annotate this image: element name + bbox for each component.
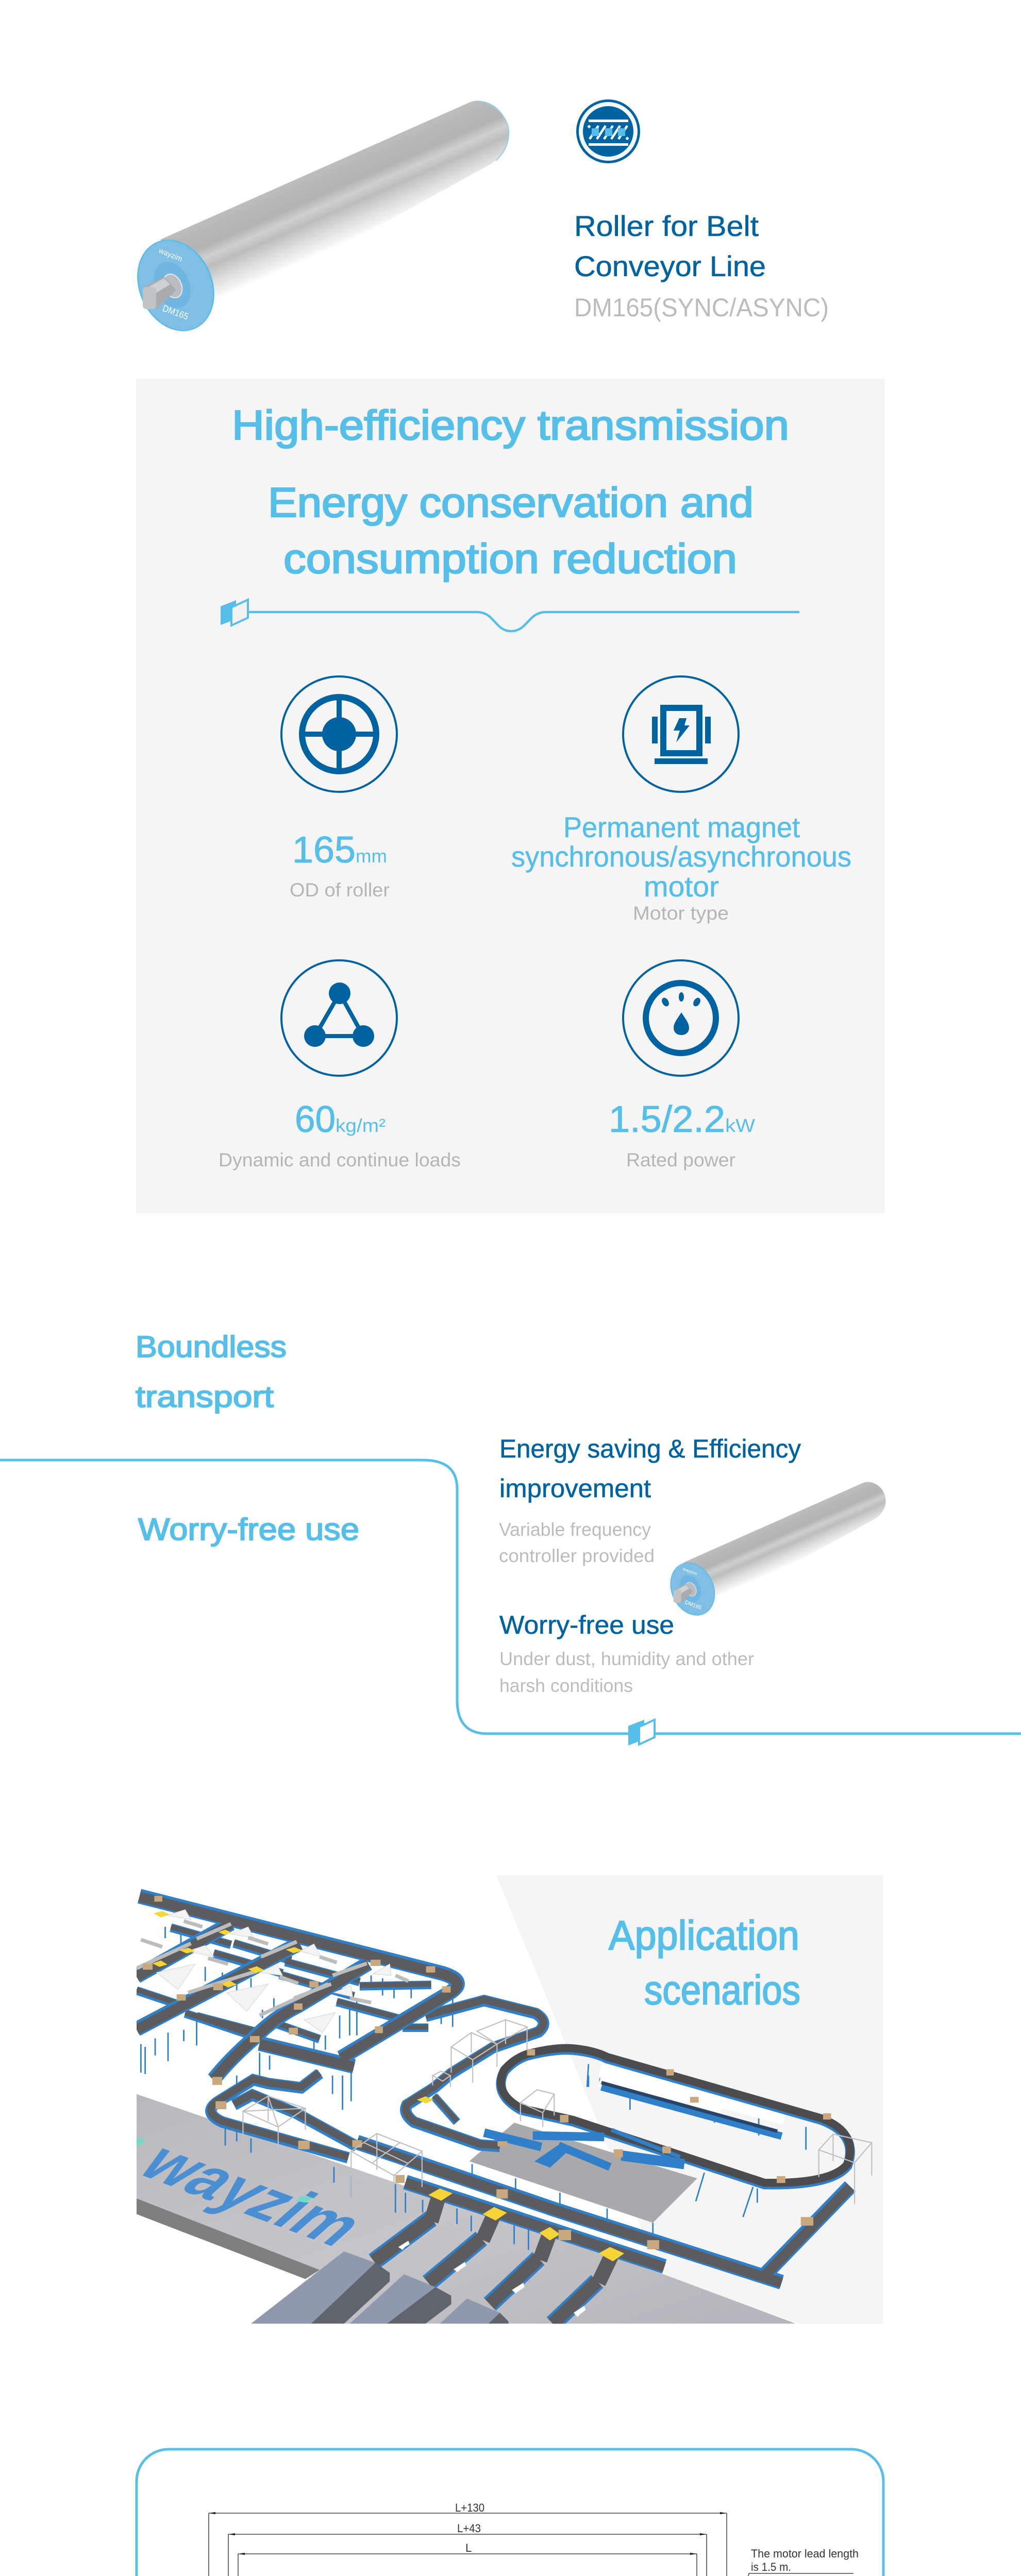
conveyor line scene [123,1896,872,2324]
floor arrows [398,2241,585,2317]
spec: loads [219,1099,461,1171]
spec: motor type: synchronous/asynchronous [511,840,851,873]
product roller image, small: DM165 [684,1600,702,1611]
dimension labels: The motor lead length [751,2547,859,2560]
heading: efficiency [232,402,789,582]
title: Conveyor Line [574,250,766,282]
winding belts [211,1999,544,2158]
feature: energy saving [499,1434,801,1566]
platform [469,2123,697,2223]
spec: roller OD [290,829,390,901]
dimension labels: L+130 [455,2501,484,2514]
feature: energy saving: Energy saving & Efficiency [499,1434,801,1463]
dimension labels: L+43 [457,2522,481,2535]
heading: application scenarios [609,1912,800,2013]
support legs [141,1927,806,2250]
heading: application scenarios: scenarios [644,1967,800,2013]
oval sorter support [600,2070,784,2136]
feature: energy saving: Variable frequency [499,1519,651,1540]
feature: worry-free use: Worry-free use [499,1611,674,1639]
feature: worry-free use [499,1611,754,1696]
lower level belts [137,1927,457,2122]
feature: energy saving: controller provided [499,1545,655,1566]
icon: brand logo [576,99,640,163]
heading: boundless transport: transport [136,1380,274,1414]
heading: boundless transport: Boundless [136,1330,287,1364]
dimension labels: L [465,2541,472,2554]
spec: power: 1.5/2.2 [609,1099,725,1140]
spec: loads: Dynamic and continue loads [219,1149,461,1171]
connector line [0,1460,1021,1745]
dimension labels [187,2501,859,2576]
white cones [157,1910,391,2032]
spec: power [609,1099,755,1171]
spec: power: kW [725,1115,755,1136]
parcels [143,1896,831,2249]
spec: power: Rated power [626,1149,735,1171]
heading: efficiency: High-efficiency transmission [232,402,789,449]
feature: worry-free use: Under dust, humidity and other [499,1648,754,1669]
spec: motor type: motor [644,870,719,903]
steel frames [243,2020,872,2213]
icon: power gauge [623,960,739,1076]
title [574,210,829,322]
feature: energy saving: improvement [499,1474,651,1503]
panel: key specifications [136,379,884,1213]
main belts [137,1896,850,2283]
heading: worry-free use: Worry-free use [138,1512,359,1547]
dimension lines [199,2513,853,2576]
spec: loads: kg/m² [336,1115,386,1136]
floor logo [137,2138,355,2246]
heading: efficiency: Energy conservation and [268,480,754,526]
product roller image, small [662,1482,886,1623]
chutes [374,2193,611,2324]
oval conveyor [501,2048,850,2184]
feature: worry-free use: harsh conditions [499,1675,633,1696]
dimension labels: is 1.5 m. [751,2561,791,2573]
product roller image, small: wayzim [681,1566,698,1577]
grey ribbons [137,1921,408,2015]
spec: motor type: Motor type [633,903,729,924]
containers [251,2251,508,2324]
divider with tab icon [221,600,799,631]
spec: roller OD: mm [356,845,387,867]
heading: efficiency: consumption reduction [283,536,737,582]
icon: roller diameter [281,676,397,792]
title: Roller for Belt [574,210,759,242]
heading: boundless transport [136,1330,287,1414]
icon: load nodes [281,960,397,1076]
product roller image: DM165 [161,303,190,322]
spec: roller OD: 165 [292,829,356,871]
spec: motor type [511,811,851,924]
product roller image [123,101,509,344]
yellow scan pads [153,1911,624,2261]
floor logo: wayzim [123,2131,381,2258]
spec: motor type: Permanent magnet [563,811,800,843]
title: DM165(SYNC/ASYNC) [574,293,829,322]
spec: loads: 60 [295,1099,336,1140]
product roller image: wayzim [157,246,183,264]
platform sorters [484,2130,684,2167]
heading: application scenarios: Application [609,1912,799,1958]
spec: roller OD: OD of roller [290,879,390,901]
panel: dimension drawing [137,2449,883,2576]
panel: application scenarios background [496,1875,883,2324]
icon: motor [623,676,739,792]
